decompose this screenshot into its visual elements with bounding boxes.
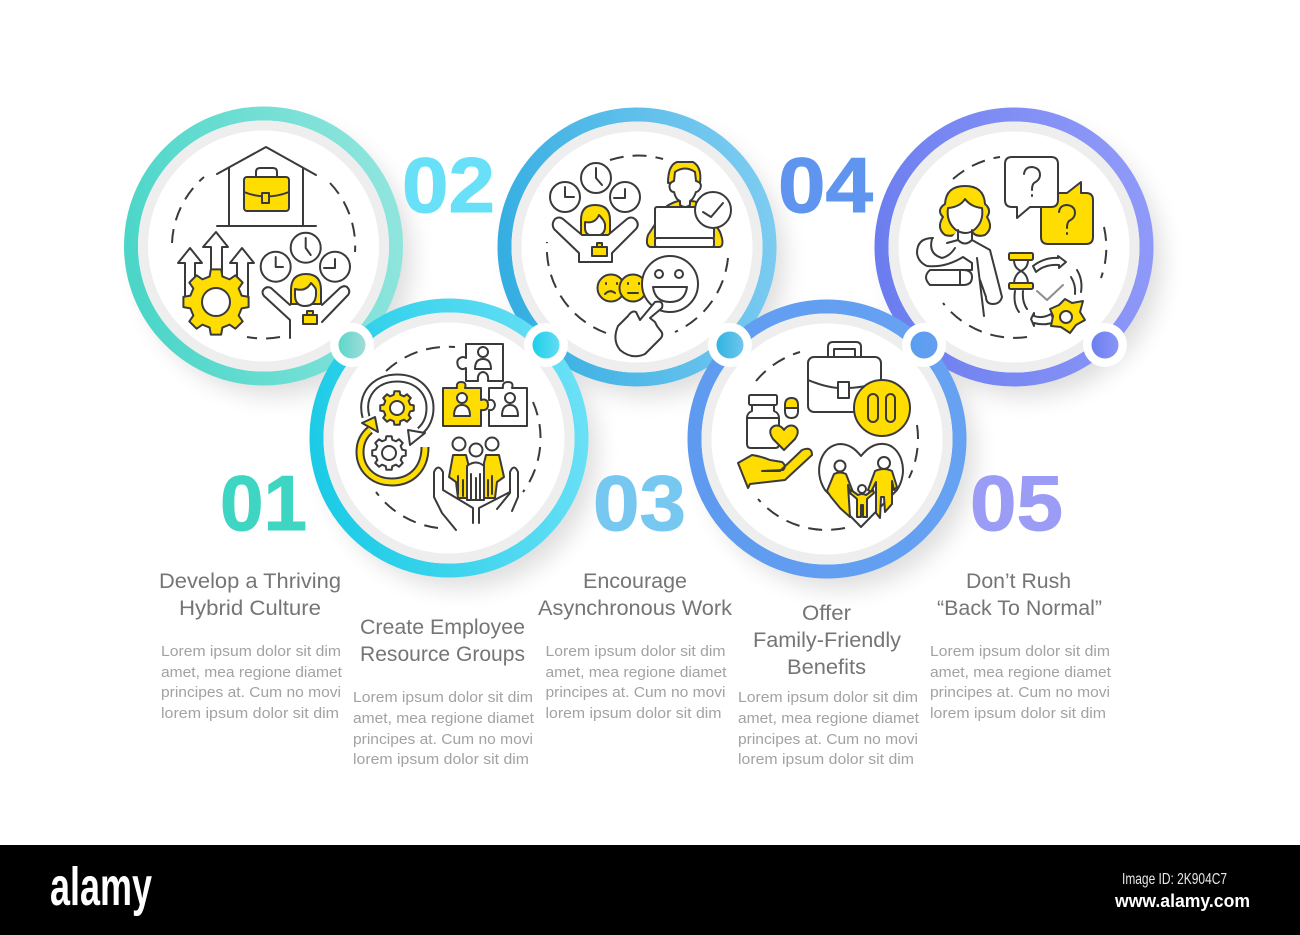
heading 5: “Back To Normal” — [937, 596, 1102, 620]
icon: puzzle pieces with people — [443, 344, 527, 426]
body 1: amet, mea regione diamet — [161, 665, 342, 681]
dashed arc 2 — [376, 347, 541, 528]
heading 2: Resource Groups — [360, 642, 525, 666]
body 3: Lorem ipsum dolor sit dim — [546, 644, 726, 660]
body 1: lorem ipsum dolor sit dim — [161, 706, 339, 722]
body 1: Lorem ipsum dolor sit dim — [161, 644, 341, 660]
body 3: lorem ipsum dolor sit dim — [546, 706, 722, 722]
body 4: principes at. Cum no movi — [738, 732, 918, 748]
heading 3: Asynchronous Work — [538, 596, 732, 620]
heading 4 — [753, 601, 901, 679]
body 4 — [738, 690, 919, 768]
body 1 — [161, 644, 342, 722]
number 02: 02 — [402, 141, 495, 229]
body 2: lorem ipsum dolor sit dim — [353, 752, 529, 768]
heading 5 — [937, 569, 1102, 620]
heading 4: Family-Friendly — [753, 628, 901, 652]
text block 3 — [538, 569, 732, 722]
body 2: amet, mea regione diamet — [353, 711, 534, 727]
body 5: Lorem ipsum dolor sit dim — [930, 644, 1110, 660]
dashed arc 5 — [943, 157, 1106, 338]
icon: woman with clocks — [550, 163, 640, 262]
ring 1 — [131, 114, 396, 378]
website: www.alamy.com — [1114, 891, 1250, 911]
heading 5: Don’t Rush — [966, 569, 1071, 593]
icon: woman carrying baby — [917, 186, 1002, 316]
icon: hourglass with cycle and gear — [1009, 253, 1085, 333]
dashed arc 1 — [172, 177, 355, 338]
panel: circle 2 employee resource groups — [316, 306, 582, 570]
body 2: Lorem ipsum dolor sit dim — [353, 690, 533, 706]
ring 5 — [882, 114, 1146, 380]
icon: gear cycle — [360, 378, 430, 482]
body 2: principes at. Cum no movi — [353, 732, 533, 748]
text block 5 — [930, 569, 1111, 722]
body 4: amet, mea regione diamet — [738, 711, 919, 727]
number 04: 04 — [778, 141, 873, 229]
connector dot 5 — [1083, 323, 1127, 367]
heading 4: Benefits — [787, 655, 866, 679]
heading 3: Encourage — [583, 569, 687, 593]
heading 1: Hybrid Culture — [179, 596, 321, 620]
icon: question speech bubbles — [1005, 157, 1093, 244]
icon: people held in hands — [434, 438, 518, 530]
body 4: lorem ipsum dolor sit dim — [738, 752, 914, 768]
heading 4: Offer — [802, 601, 851, 625]
ring 3 — [504, 114, 770, 380]
number 03: 03 — [593, 459, 686, 547]
icon: man with laptop and check — [647, 162, 731, 247]
icon: medicine bottle and caring hand — [738, 395, 812, 488]
icon: house with briefcase — [217, 147, 316, 226]
body 3 — [546, 644, 726, 722]
text block 2 — [353, 615, 534, 768]
image id: Image ID: 2K904C7 — [1122, 871, 1227, 888]
heading 1 — [159, 569, 341, 620]
panel: circle 1 hybrid culture — [131, 114, 396, 378]
number 05: 05 — [970, 459, 1063, 547]
panel: circle 3 asynchronous work — [504, 114, 770, 380]
panel: circle 5 back to normal — [882, 114, 1146, 380]
heading 2: Create Employee — [360, 615, 525, 639]
icon: briefcase with pause — [808, 342, 910, 436]
connector dot 2 — [524, 323, 568, 367]
number 01: 01 — [220, 459, 307, 547]
heading 2 — [360, 615, 525, 666]
body 5 — [930, 644, 1111, 722]
body 2 — [353, 690, 534, 768]
body 5: lorem ipsum dolor sit dim — [930, 706, 1106, 722]
icon: emoji rating with pointing hand — [598, 256, 698, 356]
body 5: amet, mea regione diamet — [930, 665, 1111, 681]
heading 1: Develop a Thriving — [159, 569, 341, 593]
body 5: principes at. Cum no movi — [930, 685, 1110, 701]
icon: growth arrows and gear — [178, 232, 254, 335]
connector dot 4 — [902, 323, 946, 367]
dashed arc 4 — [756, 352, 918, 530]
text block 1 — [159, 569, 342, 722]
heading 3 — [538, 569, 732, 620]
dashed arc 3 — [547, 156, 728, 333]
alamy logo: alamy — [50, 857, 152, 917]
body 4: Lorem ipsum dolor sit dim — [738, 690, 918, 706]
icon: woman juggling clocks — [261, 233, 350, 338]
icon: family in heart — [819, 444, 903, 527]
connector dot 1 — [330, 323, 374, 367]
body 3: principes at. Cum no movi — [546, 685, 726, 701]
panel: circle 4 family-friendly benefits — [694, 306, 960, 572]
text block 4 — [738, 601, 919, 768]
connector dot 3 — [708, 323, 752, 367]
footer bar — [0, 845, 1300, 935]
ring 2 — [316, 306, 582, 570]
ring 4 — [694, 306, 960, 572]
body 1: principes at. Cum no movi — [161, 685, 341, 701]
body 3: amet, mea regione diamet — [546, 665, 726, 681]
